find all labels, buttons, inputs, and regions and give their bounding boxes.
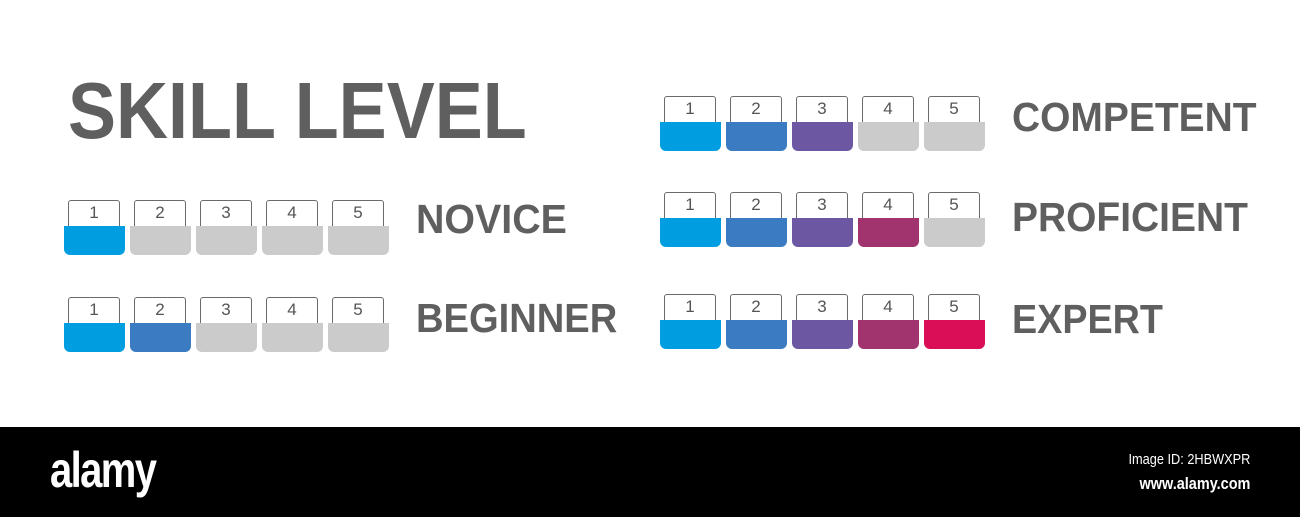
row: competent <box>660 96 985 151</box>
row: novice: 1 <box>89 203 99 222</box>
row: novice <box>64 200 389 255</box>
label: proficient: PROFICIENT <box>1012 194 1248 240</box>
row: beginner: 5 <box>353 300 363 319</box>
row: competent: 1 <box>685 99 695 118</box>
row: proficient <box>660 192 985 247</box>
row: competent: 5 <box>949 99 959 118</box>
label: competent: COMPETENT <box>1012 94 1257 140</box>
row: expert <box>660 294 985 349</box>
row: proficient: 3 <box>817 195 827 214</box>
footer bar <box>0 427 1300 517</box>
row: expert: 2 <box>751 297 761 316</box>
row: novice: 3 <box>221 203 231 222</box>
label: beginner: BEGINNER <box>416 295 617 341</box>
row: expert: 3 <box>817 297 827 316</box>
row: novice: 2 <box>155 203 165 222</box>
image id: Image ID: 2HBWXPR <box>1128 451 1250 468</box>
website: www.alamy.com <box>1139 474 1250 493</box>
row: beginner: 3 <box>221 300 231 319</box>
row: proficient: 5 <box>949 195 959 214</box>
row: competent: 4 <box>883 99 893 118</box>
row: beginner <box>64 297 389 352</box>
title: SKILL LEVEL <box>68 66 527 155</box>
label: novice: NOVICE <box>416 196 567 242</box>
row: competent: 2 <box>751 99 761 118</box>
logo: alamy: alamy <box>50 442 155 498</box>
row: novice: 4 <box>287 203 297 222</box>
row: expert: 1 <box>685 297 695 316</box>
row: proficient: 2 <box>751 195 761 214</box>
row: competent: 3 <box>817 99 827 118</box>
row: beginner: 1 <box>89 300 99 319</box>
row: beginner: 2 <box>155 300 165 319</box>
row: proficient: 1 <box>685 195 695 214</box>
row: expert: 5 <box>949 297 959 316</box>
label: expert: EXPERT <box>1012 296 1163 342</box>
row: novice: 5 <box>353 203 363 222</box>
row: expert: 4 <box>883 297 893 316</box>
row: proficient: 4 <box>883 195 893 214</box>
row: beginner: 4 <box>287 300 297 319</box>
